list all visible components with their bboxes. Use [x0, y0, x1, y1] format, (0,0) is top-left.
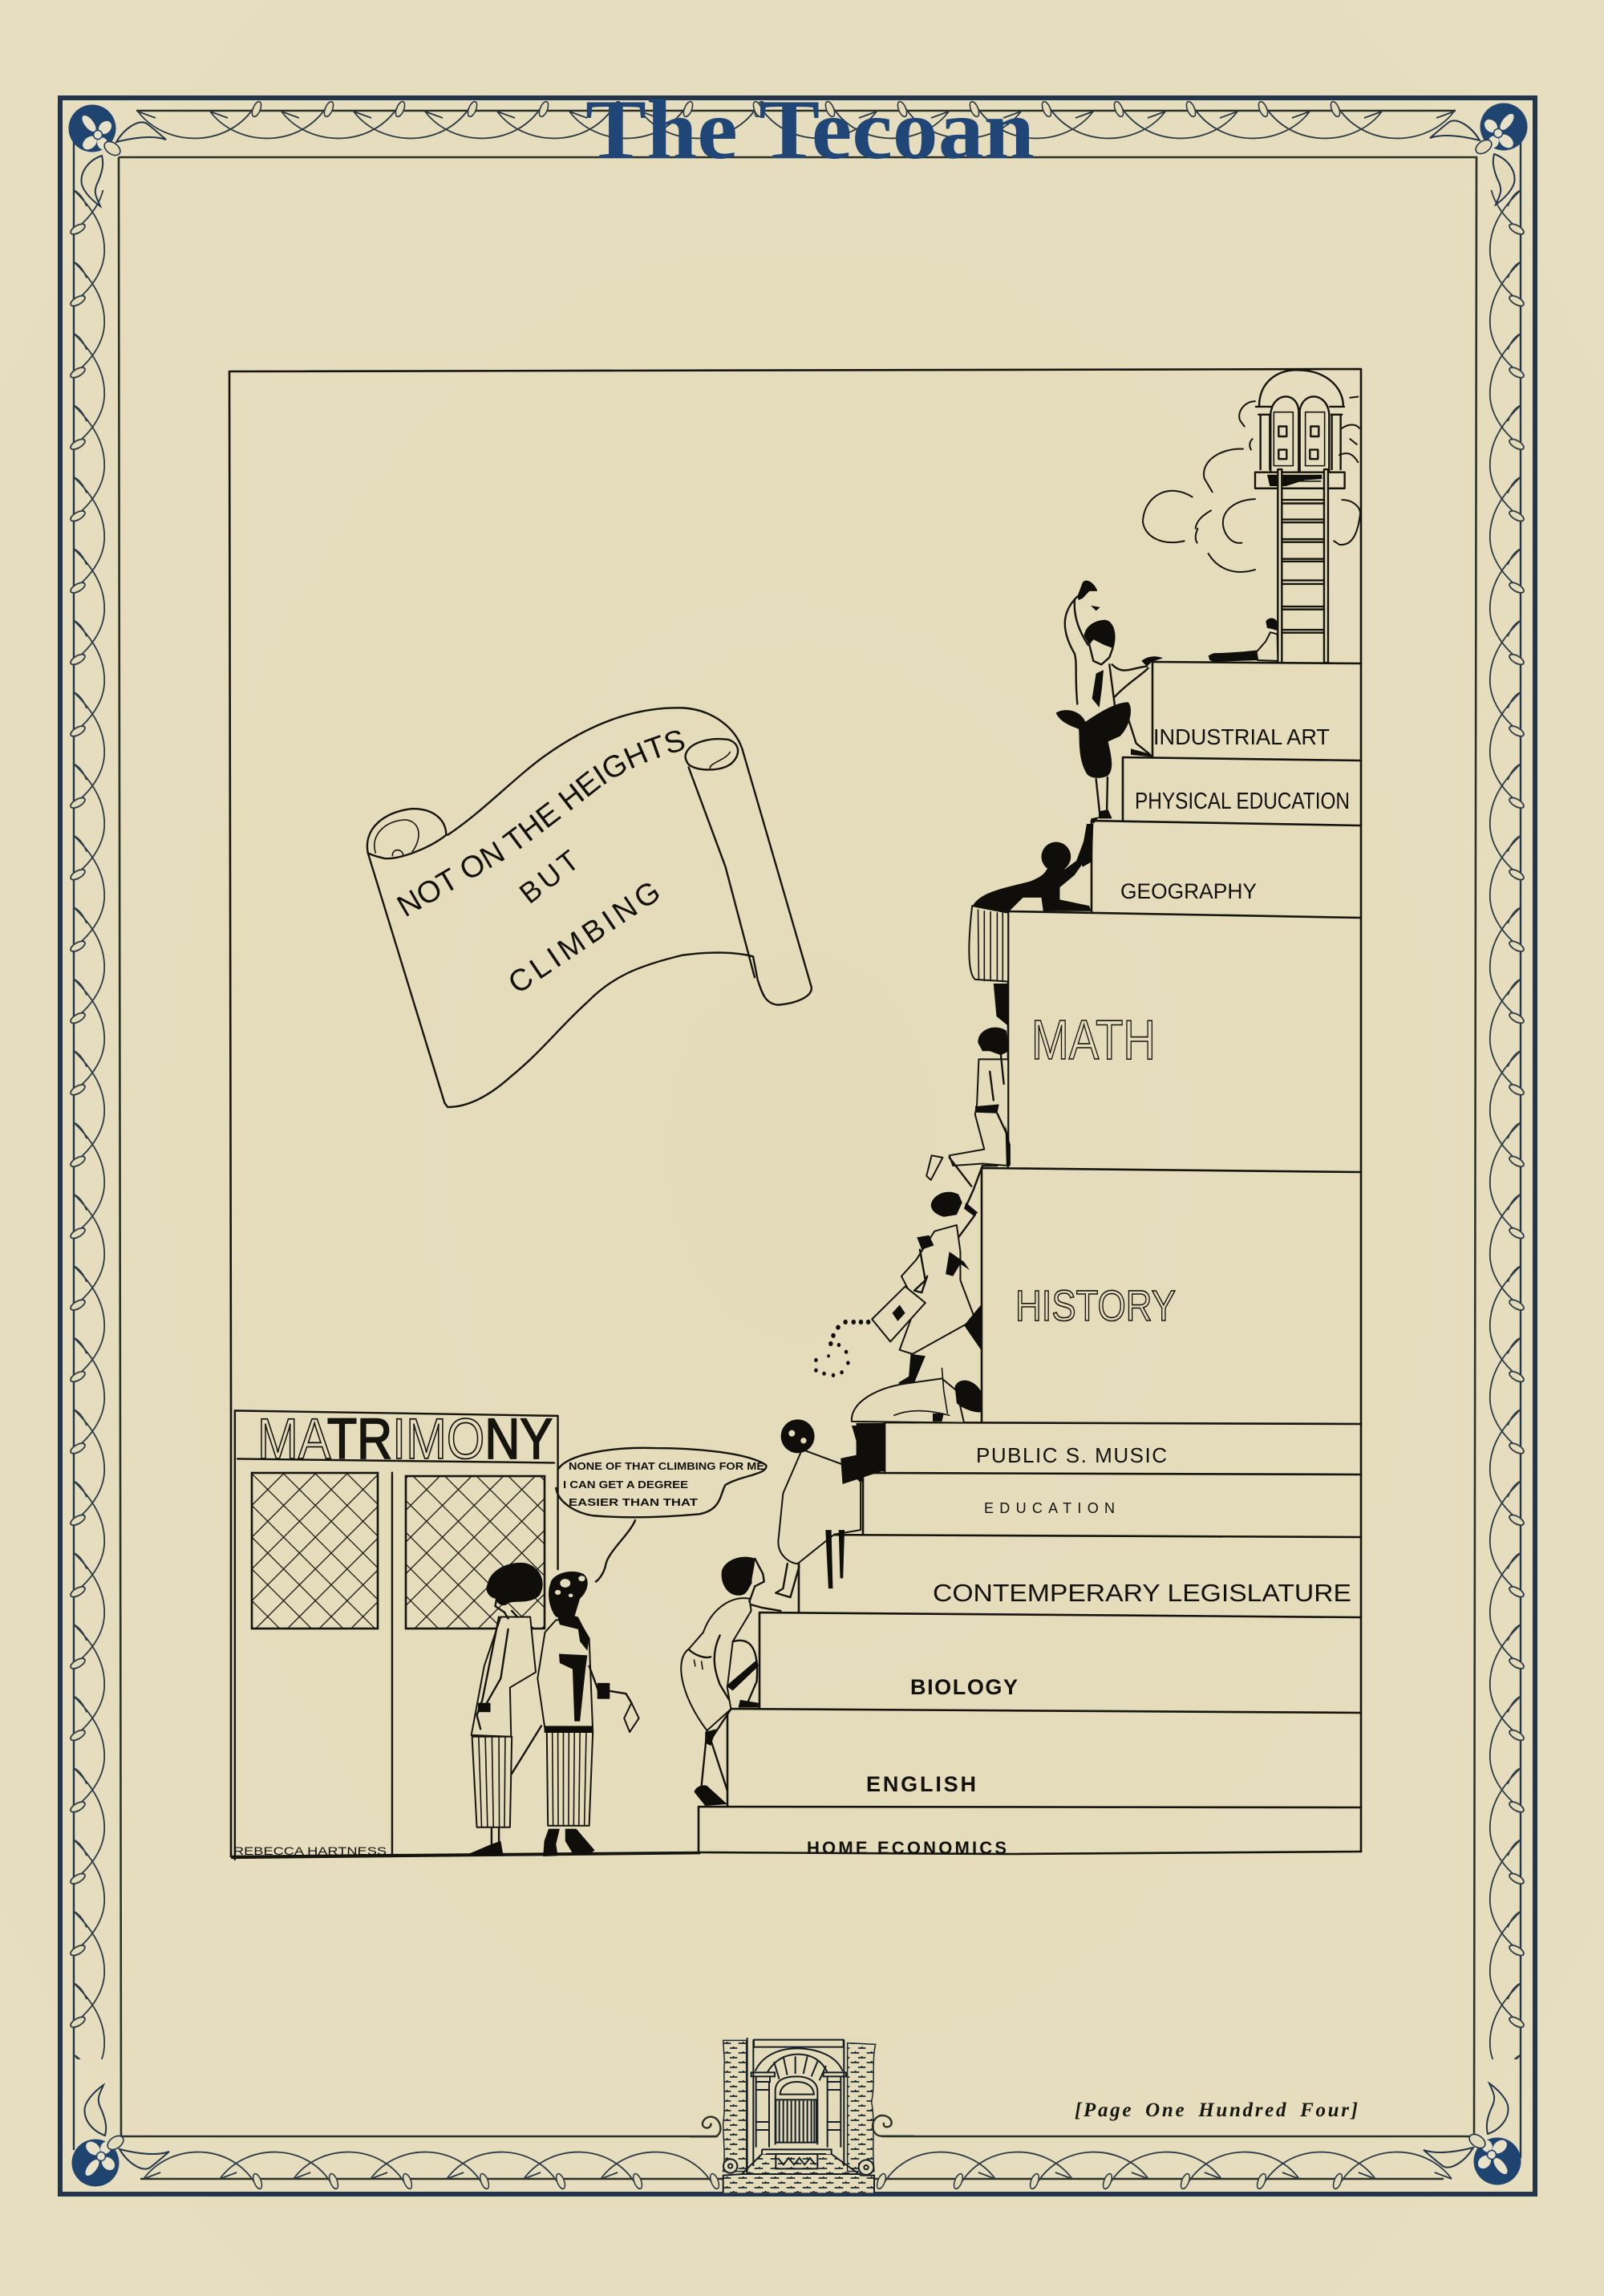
page number: [Page One Hundred Four]	[1075, 2099, 1358, 2121]
left window lattice	[252, 1473, 378, 1629]
small figure at the ladder's foot	[1209, 618, 1278, 662]
brick walls	[723, 2040, 876, 2193]
seated girl on the education step	[776, 1419, 885, 1597]
top climber and ladder	[1056, 370, 1360, 867]
black climber's raised arm tip	[1080, 824, 1093, 867]
step label: physical education: PHYSICAL EDUCATION	[1135, 789, 1350, 814]
bubble outline	[556, 1448, 766, 1582]
bubble text: I CAN GET A DEGREE	[563, 1479, 688, 1491]
girl bending at the base of history	[840, 1369, 982, 1484]
left vine	[64, 190, 112, 2059]
bead string	[814, 1320, 870, 1377]
step label: education: EDUCATION	[984, 1500, 1115, 1516]
top garland, left half	[138, 100, 766, 138]
scroll outline	[367, 708, 812, 1107]
woman right	[512, 1572, 639, 1856]
climbing girl at the bottom	[681, 1557, 780, 1806]
girl in full skirt on history	[814, 1158, 997, 1398]
handbag	[872, 1287, 926, 1341]
girl reaching to the top step	[1056, 581, 1163, 824]
black climber with striped skirt	[969, 836, 1093, 1027]
clouds	[1143, 396, 1360, 572]
ladder	[1278, 469, 1328, 663]
corner roundel bottom left	[72, 2085, 169, 2187]
matrimony sign: MATRIMONY	[257, 1408, 553, 1471]
top garland, right half	[751, 100, 1454, 138]
right vine	[1482, 190, 1530, 2059]
middle climbers	[814, 836, 1093, 1484]
signature: REBECCA HARTNESS	[233, 1844, 387, 1857]
school building on the clouds	[1255, 370, 1345, 489]
step label: biology: BIOLOGY	[910, 1675, 1018, 1699]
speech bubble	[556, 1448, 766, 1582]
right window lattice	[406, 1476, 545, 1629]
scroll text line 1: NOT ON THE HEIGHTS	[396, 730, 685, 916]
bubble text: NONE OF THAT CLIMBING FOR ME	[569, 1460, 764, 1472]
corner roundel bottom right	[1424, 2083, 1521, 2185]
bottom garland, left half	[144, 2152, 721, 2190]
matrimony building	[232, 1408, 699, 1860]
step label: public s. music: PUBLIC S. MUSIC	[976, 1443, 1167, 1467]
girl climbing on math	[926, 1028, 1011, 1180]
building lines	[232, 1410, 699, 1860]
woman left	[466, 1563, 543, 1856]
entrance doorway emblem	[690, 2038, 914, 2193]
arch and columns	[723, 2038, 874, 2193]
scroll banner	[366, 707, 813, 1109]
step label: math: MATH	[1031, 1008, 1156, 1071]
bottom garland, right half	[875, 2152, 1452, 2190]
step label: geography: GEOGRAPHY	[1120, 879, 1257, 903]
scroll curls	[690, 2117, 720, 2136]
two women watching	[466, 1563, 639, 1856]
step label: history: HISTORY	[1015, 1282, 1176, 1330]
scroll text line 3: CLIMBING	[503, 873, 670, 1000]
step label: industrial art: INDUSTRIAL ART	[1153, 724, 1330, 749]
panel: illustration frame and staircase	[229, 369, 1361, 1856]
bubble text: EASIER THAN THAT	[569, 1496, 698, 1508]
title: The Tecoan	[585, 83, 1035, 176]
step label: contemperary legislature: CONTEMPERARY LEGISLATURE	[933, 1579, 1351, 1607]
scroll text line 2: BUT	[513, 841, 588, 910]
corner roundel top right	[1430, 103, 1527, 205]
step label: home economics: HOME ECONOMICS	[807, 1838, 1007, 1858]
corner roundel top left	[69, 104, 166, 206]
step label: english: ENGLISH	[866, 1772, 976, 1796]
bubble text	[563, 1460, 764, 1508]
